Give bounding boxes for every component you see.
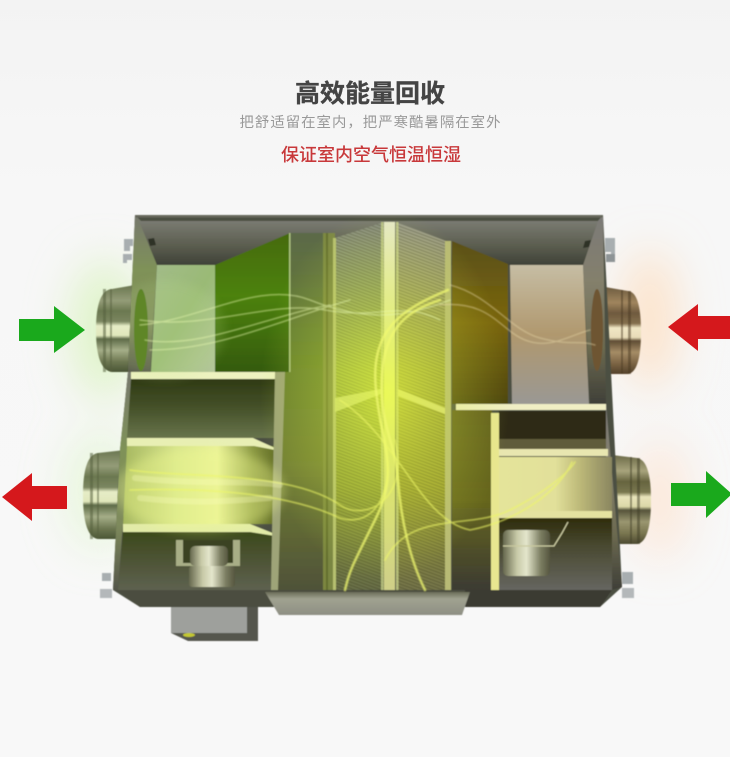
lower chamber xyxy=(499,518,612,590)
right rear wall xyxy=(510,265,589,404)
upper chamber xyxy=(499,411,606,449)
amber heat exchanger block xyxy=(452,241,508,404)
right duct opening xyxy=(591,289,603,371)
arrow: red outlet left xyxy=(2,473,67,521)
glow: air halos xyxy=(66,250,684,560)
left lower chambers xyxy=(118,372,285,590)
fan housing xyxy=(499,457,612,513)
duct: lower right outlet xyxy=(612,455,651,544)
duct: lower left outlet xyxy=(83,450,125,539)
right filter panel xyxy=(396,222,446,590)
title: 高效能量回收 xyxy=(295,80,445,108)
right outer wall xyxy=(583,215,606,404)
right duct side panel xyxy=(452,410,492,590)
fan housing xyxy=(123,446,275,524)
upper chamber xyxy=(127,379,275,438)
arrow: red inlet right xyxy=(668,304,730,351)
top ceiling xyxy=(139,221,598,265)
central strip xyxy=(384,222,395,591)
housing shell xyxy=(113,215,622,607)
red slogan: 保证室内空气恒温恒湿 xyxy=(281,145,461,165)
left duct opening xyxy=(134,289,148,371)
left filter panel xyxy=(335,222,384,590)
fan motor xyxy=(503,522,568,576)
arrow: green inlet left xyxy=(19,306,85,353)
vents xyxy=(148,238,156,246)
control box xyxy=(171,590,258,641)
duct: upper right inlet xyxy=(605,287,641,374)
left outer wall xyxy=(128,215,157,372)
shelves xyxy=(131,372,277,379)
arrow: green outlet right xyxy=(671,471,730,518)
air flow streams xyxy=(130,285,595,590)
lower chamber xyxy=(118,532,278,590)
heading block xyxy=(240,80,500,165)
divider strip xyxy=(271,372,285,590)
green heat exchanger block xyxy=(215,233,290,372)
left duct side panel xyxy=(278,233,327,590)
bottom rail xyxy=(118,590,465,607)
filter frames xyxy=(333,222,451,591)
infographic: heat recovery ventilator cutaway xyxy=(2,80,730,642)
glow: yellow energy overlay xyxy=(118,231,500,558)
duct: upper left inlet xyxy=(96,285,135,372)
left rear wall xyxy=(151,265,216,372)
shelves xyxy=(456,404,606,410)
fan motor xyxy=(176,540,240,587)
filter core xyxy=(333,222,451,591)
ventilator housing xyxy=(113,215,622,615)
subtitle: 把舒适留在室内，把严寒酷暑隔在室外 xyxy=(240,113,500,131)
right lower chambers xyxy=(456,404,612,590)
mounting brackets xyxy=(100,238,634,598)
divider strip xyxy=(491,413,499,590)
filter mesh texture xyxy=(335,222,446,590)
drain tray xyxy=(265,592,470,615)
